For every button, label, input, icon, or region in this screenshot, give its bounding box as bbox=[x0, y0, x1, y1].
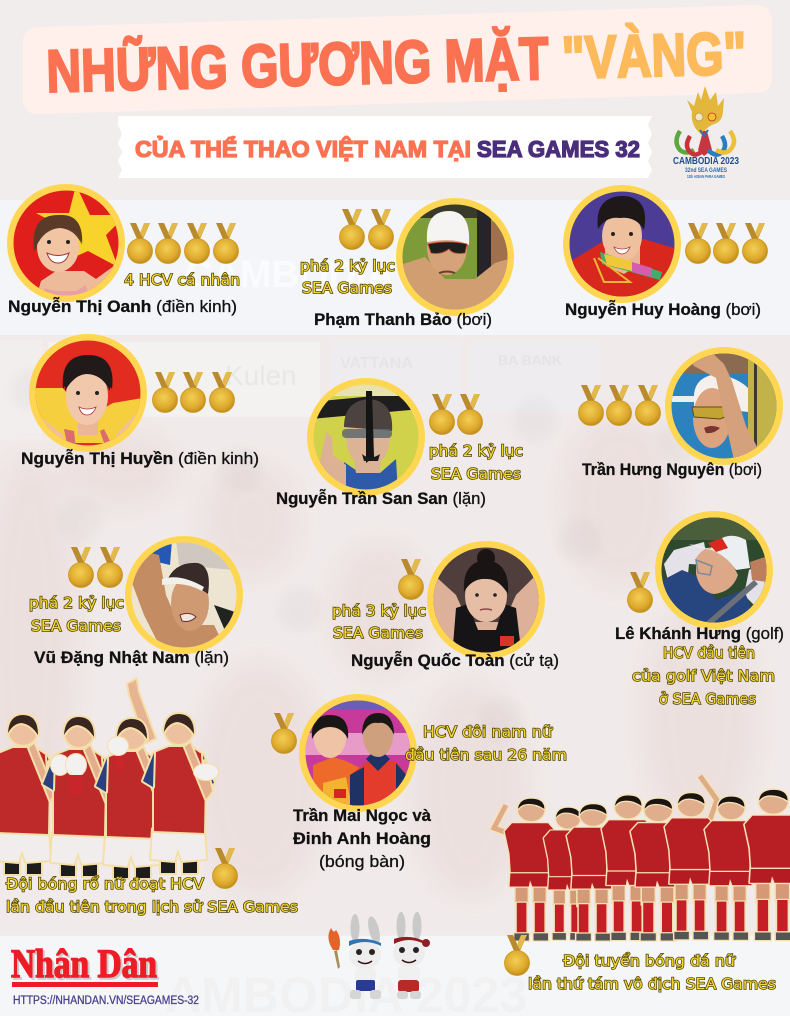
athlete: Nguyễn Thị Huyền bbox=[21, 338, 259, 468]
medal: 1 gold bbox=[272, 713, 296, 754]
name: Nguyễn Quốc Toàn (cử tạ) bbox=[351, 651, 559, 670]
name: Nguyễn Thị Oanh (điền kinh) bbox=[8, 297, 237, 316]
portrait bbox=[128, 540, 244, 655]
medals: 2 gold bbox=[430, 394, 482, 434]
faded photo background: CAMBODIA 2023 bbox=[185, 254, 488, 296]
names: (bóng bàn) bbox=[319, 852, 405, 871]
portrait bbox=[400, 202, 515, 317]
athlete: Nguyễn Trần San San bbox=[276, 382, 523, 508]
medal: 1 gold bbox=[398, 559, 424, 600]
record note: phá 2 kỷ lục bbox=[29, 594, 124, 612]
record note: SEA Games bbox=[302, 279, 392, 297]
athlete: Nguyễn Thị Oanh bbox=[8, 185, 240, 316]
mascot: red rabbit bbox=[393, 912, 430, 999]
record note: phá 2 kỷ lục bbox=[300, 257, 395, 275]
subtitle ribbon: SEA GAMES 32 bbox=[477, 136, 640, 162]
subtitle ribbon: CỦA THỂ THAO VIỆT NAM TẠI bbox=[135, 134, 471, 162]
team photo bbox=[0, 680, 218, 878]
record note bbox=[429, 442, 523, 483]
names: Đinh Anh Hoàng bbox=[293, 829, 431, 848]
source URL: HTTPS://NHANDAN.VN/SEAGAMES-32 bbox=[13, 995, 199, 1007]
athlete: Nguyễn Huy Hoàng bbox=[565, 188, 768, 319]
portrait bbox=[302, 698, 414, 813]
achievement note bbox=[528, 952, 776, 993]
achievement note: 4 HCV cá nhân bbox=[124, 271, 240, 289]
record note: SEA Games bbox=[431, 465, 521, 483]
portrait bbox=[668, 350, 780, 462]
record note: SEA Games bbox=[333, 624, 423, 642]
subtitle ribbon bbox=[118, 116, 652, 178]
medals: 2 gold bbox=[68, 547, 122, 588]
faded photo background: BA BANK bbox=[498, 352, 562, 368]
medals: 3 gold bbox=[578, 385, 660, 426]
achievement note: HCV đôi nam nữ bbox=[423, 723, 554, 741]
athlete: Nguyễn Quốc Toàn bbox=[332, 544, 559, 670]
names bbox=[293, 806, 432, 871]
achievement note: Đội tuyển bóng đá nữ bbox=[563, 952, 737, 970]
achievement note: của golf Việt Nam bbox=[632, 667, 775, 685]
medals: 2 gold bbox=[340, 209, 394, 250]
achievement note bbox=[6, 875, 298, 916]
name: Lê Khánh Hưng (golf) bbox=[615, 624, 784, 643]
achievement note: HCV đầu tiên bbox=[663, 644, 755, 662]
portrait bbox=[430, 544, 542, 660]
portrait bbox=[566, 188, 678, 304]
name: Nguyễn Trần San San (lặn) bbox=[276, 489, 486, 508]
team photo bbox=[494, 776, 790, 940]
medals: 3 gold bbox=[686, 223, 768, 264]
mascots bbox=[328, 912, 430, 999]
record note bbox=[300, 257, 395, 297]
logo: Cambodia 2023 SEA Games: CAMBODIA 2023 bbox=[673, 155, 739, 167]
athlete: Vũ Đặng Nhật Nam bbox=[29, 540, 244, 667]
achievement note: lần đầu tiên trong lịch sử SEA Games bbox=[6, 898, 298, 916]
mascot: blue rabbit with torch bbox=[328, 914, 382, 999]
portrait bbox=[28, 338, 148, 453]
achievement note: ở SEA Games bbox=[659, 690, 756, 708]
name: Nguyễn Huy Hoàng (bơi) bbox=[565, 300, 761, 319]
medal: 1 gold bbox=[504, 935, 530, 976]
achievement note bbox=[632, 644, 775, 708]
medal: 1 gold bbox=[212, 848, 238, 888]
record note: phá 3 kỷ lục bbox=[332, 602, 426, 620]
athlete: Trần Hưng Nguyên bbox=[578, 350, 780, 479]
faded photo background: Kulen bbox=[225, 360, 297, 391]
record note: phá 2 kỷ lục bbox=[429, 442, 523, 460]
achievement note: đầu tiên sau 26 năm bbox=[405, 746, 567, 764]
name: Nguyễn Thị Huyền (điền kinh) bbox=[21, 449, 259, 468]
logo: Cambodia 2023 SEA Games bbox=[673, 86, 739, 179]
record note bbox=[29, 594, 124, 635]
record note bbox=[332, 602, 426, 642]
names: Trần Mai Ngọc và bbox=[293, 806, 432, 825]
name: Phạm Thanh Bảo (bơi) bbox=[314, 310, 492, 329]
logo: Cambodia 2023 SEA Games: 32nd SEA GAMES bbox=[685, 167, 727, 174]
title banner: NHỮNG GƯƠNG MẶT "VÀNG" bbox=[46, 20, 747, 105]
athlete: Phạm Thanh Bảo bbox=[300, 202, 515, 329]
achievement note: Đội bóng rổ nữ đoạt HCV bbox=[6, 875, 205, 893]
Nhân Dân masthead: Nhân Dân bbox=[11, 941, 157, 986]
logo: Cambodia 2023 SEA Games: 12th ASEAN PARA GAMES bbox=[687, 174, 725, 179]
athlete: Lê Khánh Hưng bbox=[615, 514, 784, 708]
athletes: Trần Mai Ngọc and Đinh Anh Hoàng bbox=[272, 698, 567, 871]
faded photo background: VATTANA bbox=[340, 355, 413, 372]
record note: SEA Games bbox=[31, 617, 121, 635]
Nhân Dân masthead: Nhân Dân bbox=[13, 943, 159, 988]
achievement note bbox=[405, 723, 567, 764]
medal: 1 gold bbox=[628, 572, 652, 612]
name: Trần Hưng Nguyên (bơi) bbox=[582, 460, 762, 479]
achievement note: lần thứ tám vô địch SEA Games bbox=[528, 975, 776, 993]
portrait bbox=[10, 185, 126, 303]
name: Vũ Đặng Nhật Nam (lặn) bbox=[34, 648, 229, 667]
portrait bbox=[310, 382, 422, 493]
team: women's basketball bbox=[0, 680, 298, 916]
team: women's football bbox=[494, 776, 790, 993]
portrait bbox=[658, 514, 770, 630]
medals: 4 gold bbox=[128, 223, 238, 264]
medals: 3 gold bbox=[152, 372, 234, 412]
